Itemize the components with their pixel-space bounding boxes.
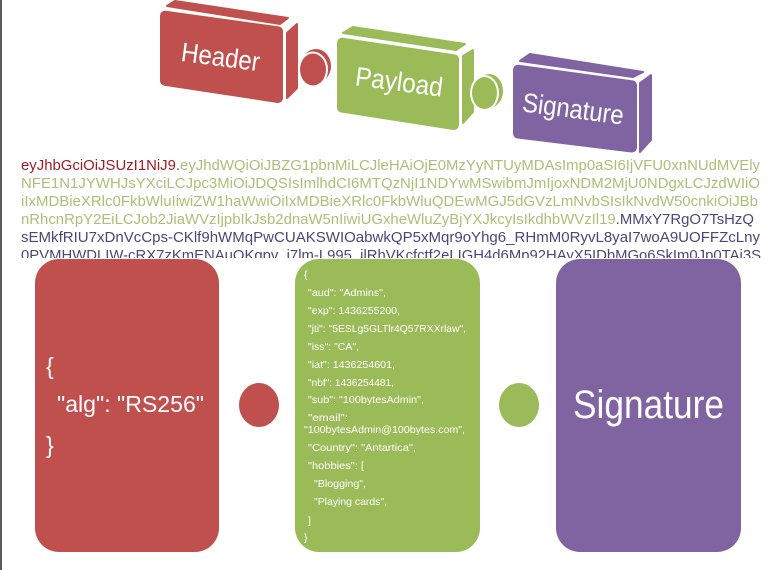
- panel: decoded payload: "sub": "100bytesAdmin",: [308, 394, 424, 406]
- encoded JWT token text: iIxMDBieXRlc0FkbWluIiwiZW1haWwiOiIxMDBieXRlc0FkbWluQDEwMGJ5dGVzLmNvbSIsIkNvdW50cnkiOiJBb: [21, 194, 758, 210]
- block: Header: [165, 1, 297, 98]
- panel: decoded payload: "iat": 1436254601,: [308, 359, 395, 371]
- panel: decoded payload: "Country": "Antartica",: [308, 442, 416, 454]
- panel: decoded payload: "Blogging",: [314, 478, 366, 490]
- panel: decoded header: {: [46, 353, 54, 379]
- panel: decoded payload: "100bytesAdmin@100bytes.com",: [304, 424, 465, 436]
- panel: decoded payload: ]: [308, 515, 311, 527]
- panel: decoded payload: "hobbies": [: [308, 460, 364, 472]
- encoded JWT token text: sEMkfRIU7xDnVcCps-CKlf9hWMqPwCUAKSWIOabwkQP5xMqr9oYhg6_RHmM0RyvL8yaI7woA9UOFFZcLny: [21, 230, 761, 246]
- operator: green circle: [499, 383, 539, 427]
- encoded JWT token text: NFE1N1JYWHJsYXciLCJpc3MiOiJDQSIsImlhdCI6MTQzNjI1NDYwMSwibmJmIjoxNDM2MjU0NDgxLCJzdWIiO: [21, 176, 760, 192]
- connector: green disc: [470, 74, 503, 111]
- panel: decoded payload: {: [304, 269, 308, 281]
- panel: signature: Signature: [573, 383, 724, 427]
- block: Signature: [518, 54, 651, 152]
- encoded JWT token text: [2, 158, 768, 266]
- panel: decoded payload: }: [304, 532, 308, 544]
- panel: decoded payload: "iss": "CA",: [308, 341, 359, 353]
- block: Header: Header: [180, 37, 262, 77]
- panel: signature: [556, 259, 741, 552]
- encoded JWT token text: nRhcnRpY2EiLCJob2JiaWVzIjpbIkJsb2dnaW5nIiwiUGxheWluZyBjYXJkcyIsIkdhbWVzIl19 .MMxY7RgO7TsHzQ: [21, 212, 754, 228]
- panel: decoded payload: "Playing cards",: [314, 496, 387, 508]
- panel: decoded payload: "aud": "Admins",: [308, 287, 386, 299]
- panel: decoded header: "alg": "RS256": [57, 391, 204, 417]
- panel: decoded header: }: [46, 432, 54, 458]
- panel: decoded payload: "email":: [308, 412, 348, 424]
- block: Payload: [342, 27, 473, 125]
- operator: red circle: [239, 383, 279, 427]
- block: Signature: Signature: [521, 87, 626, 131]
- panel: decoded payload: [295, 259, 480, 552]
- encoded JWT token text: 0PVMHWDLIW-cRX7zKmENAuQKgpv_j7lm-L995_ilRhVKcfctf2eLIGH4d6Mp92HAyX5IDbMGo6SkIm0Jp0TAj3S: [21, 248, 761, 264]
- panel: decoded payload: "jti": "5ESLg5GLTlr4Q57RXXrlaw",: [308, 323, 466, 335]
- panel: decoded header: [35, 259, 219, 552]
- encoded JWT token text: eyJhbGciOiJSUzI1NiJ9 .eyJhdWQiOiJBZG1pbnMiLCJleHAiOjE0MzYyNTUyMDAsImp0aSI6IjVFU0xnNUdMVEly: [21, 158, 761, 174]
- connector: red disc: [298, 49, 331, 88]
- block: Payload: Payload: [354, 61, 445, 103]
- panel: decoded payload: "nbf": 1436254481,: [308, 377, 394, 389]
- panel: decoded payload: "exp": 1436255200,: [308, 305, 400, 317]
